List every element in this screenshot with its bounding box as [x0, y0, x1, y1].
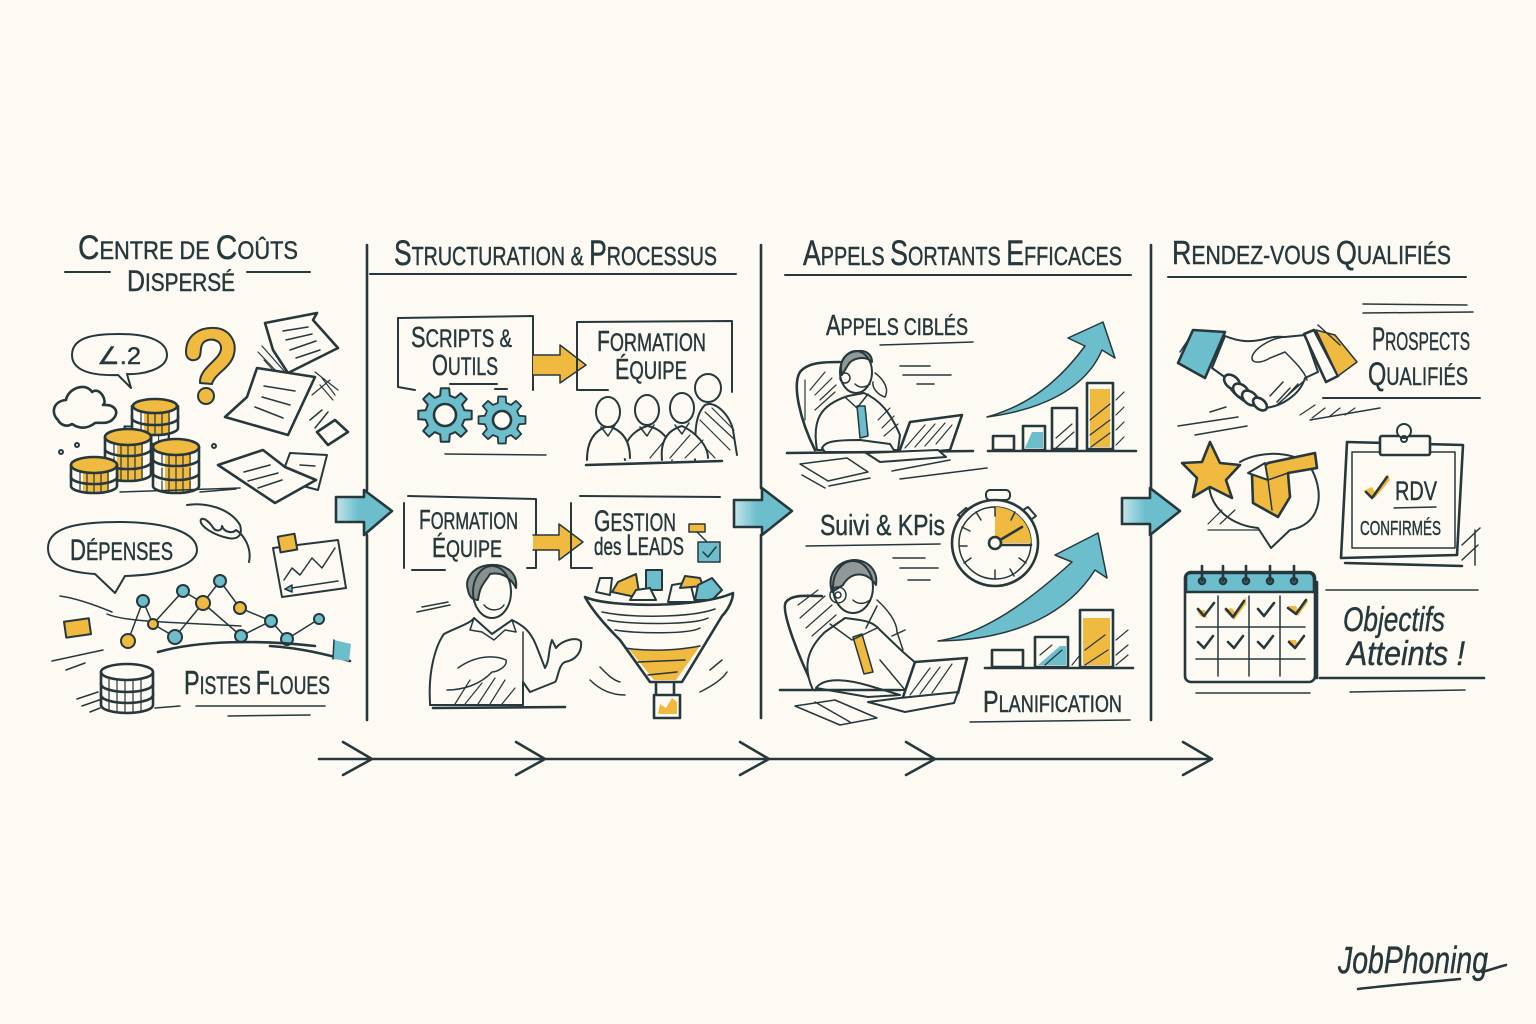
icon: speech bubble with figures — [72, 334, 167, 388]
box: formation équipe bis: FORMATION — [419, 504, 518, 535]
label: pistes floues: PISTES FLOUES — [184, 664, 330, 701]
icon: scattered papers — [218, 313, 348, 503]
label: objectifs atteints: Atteints ! — [1345, 635, 1465, 673]
heading: rendez-vous qualifiés: RENDEZ-VOUS QUALIFIÉS — [1172, 234, 1451, 271]
box: gestion des leads: GESTION — [594, 505, 676, 538]
arrow: step 2 to step 3 — [734, 488, 792, 535]
box: formation équipe bis — [404, 496, 536, 570]
label: prospects qualifiés: QUALIFIÉS — [1368, 356, 1468, 392]
icon: grey coin stack — [77, 664, 180, 713]
icon: handshake — [1178, 325, 1380, 435]
heading: structuration et processus: STRUCTURATION & PROCESSUS — [394, 234, 717, 273]
icon: rising arrow one — [987, 322, 1115, 417]
panel: rendez-vous qualifiés — [1168, 234, 1484, 693]
speech bubble: dépenses — [48, 522, 197, 593]
arrow: step 3 to step 4 — [1122, 488, 1180, 535]
label: appels ciblés: APPELS CIBLÉS — [826, 310, 968, 342]
arrow: yellow — [533, 345, 586, 383]
timeline arrow — [319, 742, 1212, 775]
icon: thumbs up box — [1248, 453, 1317, 517]
label: prospects qualifiés — [1323, 304, 1480, 398]
bar chart one — [988, 383, 1136, 451]
icon: question mark — [186, 328, 235, 404]
icon: stopwatch — [952, 490, 1038, 586]
icon: coin stacks — [59, 399, 240, 493]
heading: centre de coûts dispersé — [65, 229, 310, 298]
box: formation équipe: ÉQUIPE — [615, 353, 687, 386]
icon: clipboard rdv confirmés: CONFIRMÉS — [1360, 517, 1441, 540]
heading: centre de coûts dispersé: CENTRE DE COÛTS — [78, 229, 298, 267]
icon: gears — [418, 388, 546, 455]
icon: caller at laptop — [787, 351, 987, 488]
heading: appels sortants efficaces: APPELS SORTANTS EFFICACES — [803, 234, 1122, 273]
label: suivi et kpis: Suivi & KPis — [820, 510, 945, 542]
label: suivi et kpis — [806, 510, 945, 546]
box: scripts et outils: SCRIPTS & — [411, 322, 512, 354]
panel: structuration et processus — [370, 234, 737, 718]
box: gestion des leads: des LEADS — [594, 529, 684, 562]
box: formation équipe: FORMATION — [597, 326, 706, 358]
squiggle — [187, 504, 250, 562]
decorative chips — [52, 618, 351, 670]
icon: caller with yellow tie — [780, 558, 967, 725]
panel: appels sortants efficaces — [780, 234, 1136, 725]
label: objectifs atteints — [1196, 590, 1484, 693]
speech bubble: dépenses: DÉPENSES — [70, 534, 173, 567]
label: objectifs atteints: Objectifs — [1343, 601, 1445, 639]
box: formation équipe bis: ÉQUIPE — [432, 532, 502, 563]
bar chart two — [985, 610, 1133, 668]
icon: speech bubble with figures: ∠.2 — [97, 343, 141, 370]
logo: jobphoning: JobPhoning — [1337, 940, 1488, 982]
heading: centre de coûts dispersé: DISPERSÉ — [127, 265, 235, 298]
icon: cloud — [54, 387, 116, 428]
icon: rising arrow two — [938, 533, 1107, 641]
icon: star — [1182, 442, 1240, 498]
line chart: blurry leads — [60, 575, 350, 661]
panel: centre de coûts dispersé — [48, 229, 351, 716]
box: scripts et outils — [398, 316, 533, 390]
divider lines — [367, 245, 1151, 720]
icon: clipboard rdv confirmés: RDV — [1395, 476, 1437, 506]
icon: presenter — [417, 565, 581, 708]
label: prospects qualifiés: PROSPECTS — [1372, 321, 1470, 357]
box: gestion des leads — [571, 496, 720, 568]
box: scripts et outils: OUTILS — [432, 350, 498, 382]
icon: sticky chart card — [273, 534, 346, 597]
icon: calendar with check marks — [1185, 566, 1317, 682]
box: formation équipe — [577, 321, 732, 392]
arrow: yellow — [533, 524, 583, 560]
label: planification: PLANIFICATION — [983, 684, 1122, 719]
label: pistes floues — [184, 664, 330, 716]
icon: speech bubble with badge — [1208, 454, 1319, 548]
icon: team group — [586, 374, 737, 465]
icon: leads funnel — [585, 570, 733, 718]
icon: clipboard rdv confirmés — [1341, 424, 1480, 566]
arrow: step 1 to step 2 — [336, 490, 392, 535]
